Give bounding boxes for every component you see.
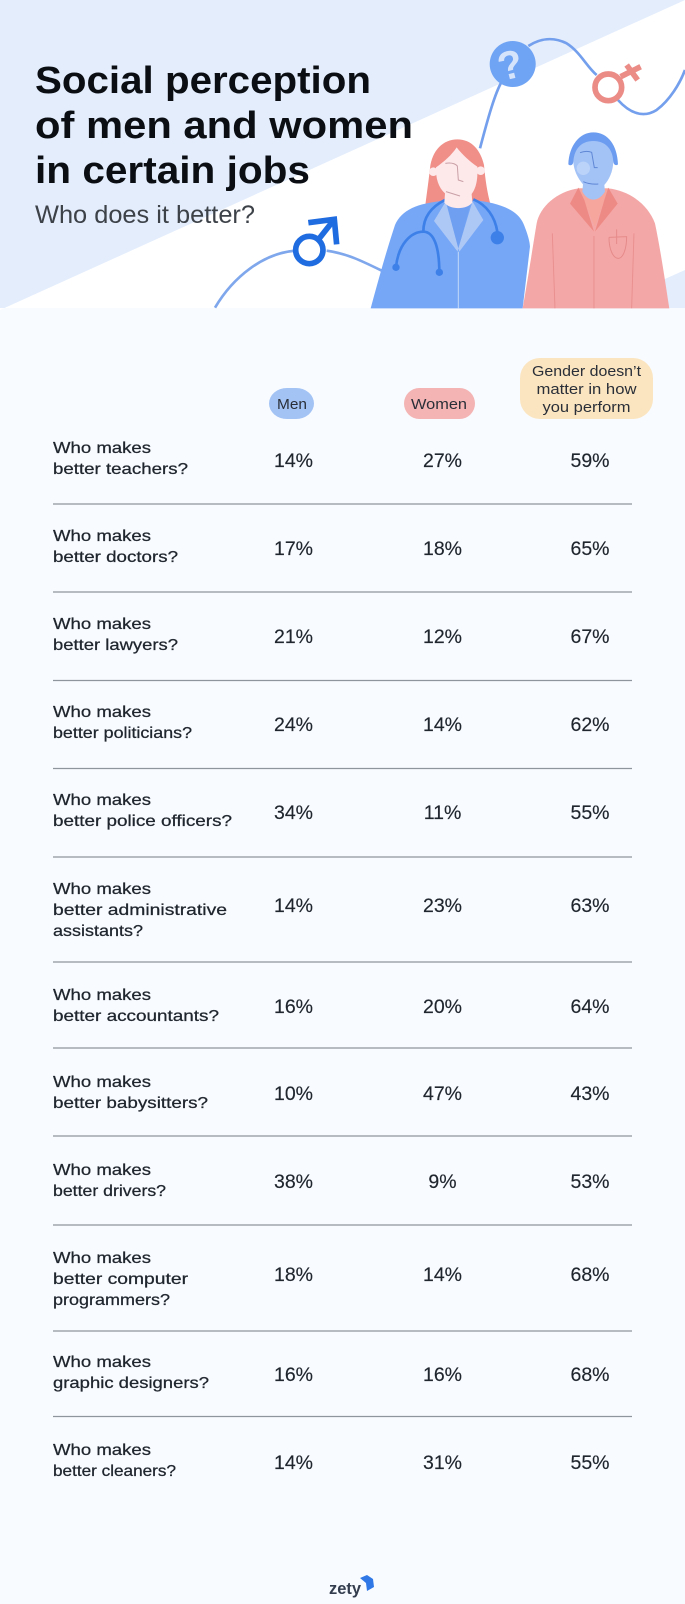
row: politicians: better politicians? bbox=[53, 725, 192, 742]
collar bbox=[434, 202, 483, 252]
row: doctors: 65% bbox=[570, 538, 610, 560]
row: graphic designers bbox=[53, 1354, 610, 1392]
row: police officers: 34% bbox=[274, 802, 313, 824]
title: in certain jobs bbox=[35, 150, 310, 192]
title: Social perception bbox=[35, 60, 371, 102]
row: computer programmers: Who makes bbox=[53, 1250, 151, 1267]
row: teachers: better teachers? bbox=[53, 461, 188, 478]
row: politicians: 62% bbox=[570, 714, 610, 736]
panel: header banner bbox=[0, 0, 685, 310]
row: doctors bbox=[53, 528, 610, 566]
row: cleaners: 31% bbox=[423, 1452, 462, 1474]
hair and ears bbox=[568, 132, 618, 165]
icon: male symbol bbox=[296, 219, 337, 264]
row: police officers: better police officers? bbox=[53, 813, 232, 830]
row: doctors: 17% bbox=[274, 538, 313, 560]
row: lawyers: Who makes bbox=[53, 616, 151, 633]
row: lawyers: 12% bbox=[423, 626, 462, 648]
row: teachers: 14% bbox=[274, 450, 313, 472]
row: cleaners: better cleaners? bbox=[53, 1463, 176, 1480]
row: accountants: 16% bbox=[274, 996, 313, 1018]
row: lawyers bbox=[53, 616, 610, 654]
row: babysitters bbox=[53, 1074, 610, 1112]
row: cleaners: 55% bbox=[570, 1452, 610, 1474]
row: computer programmers: 14% bbox=[423, 1264, 462, 1286]
illustration: male doctor bbox=[523, 132, 669, 308]
row: computer programmers: better computer bbox=[53, 1271, 189, 1288]
row: computer programmers: 18% bbox=[274, 1264, 313, 1286]
row: graphic designers: 16% bbox=[423, 1364, 462, 1386]
row: administrative assistants: better administrative bbox=[53, 902, 227, 919]
row: teachers: Who makes bbox=[53, 440, 151, 457]
row: accountants: 64% bbox=[570, 996, 610, 1018]
title bbox=[35, 60, 413, 192]
illustration: female doctor bbox=[371, 139, 530, 308]
connecting curve: male symbol line bbox=[215, 251, 382, 308]
row: administrative assistants: 63% bbox=[570, 895, 610, 917]
row: babysitters: Who makes bbox=[53, 1074, 151, 1091]
row: lawyers: better lawyers? bbox=[53, 637, 178, 654]
coat bbox=[371, 200, 530, 308]
row: administrative assistants bbox=[53, 881, 610, 940]
row: drivers: 53% bbox=[570, 1171, 610, 1193]
row: lawyers: 67% bbox=[570, 626, 610, 648]
row: teachers: 59% bbox=[570, 450, 610, 472]
row: drivers bbox=[53, 1162, 610, 1200]
row: administrative assistants: 14% bbox=[274, 895, 313, 917]
coat seams bbox=[552, 233, 634, 308]
column header: Gender doesn't matter: matter in how bbox=[536, 382, 637, 398]
column header: Gender doesn't matter: Gender doesn’t bbox=[532, 364, 641, 380]
row: computer programmers: programmers? bbox=[53, 1292, 170, 1309]
row: graphic designers: 68% bbox=[570, 1364, 610, 1386]
row: administrative assistants: Who makes bbox=[53, 881, 151, 898]
row: computer programmers bbox=[53, 1250, 610, 1309]
row: accountants bbox=[53, 987, 610, 1025]
row: babysitters: 43% bbox=[570, 1083, 610, 1105]
row: doctors: Who makes bbox=[53, 528, 151, 545]
row: lawyers: 21% bbox=[274, 626, 313, 648]
row: doctors: 18% bbox=[423, 538, 462, 560]
head and neck bbox=[429, 147, 485, 208]
lapels bbox=[570, 188, 618, 232]
scrub top bbox=[447, 203, 471, 250]
row: police officers: Who makes bbox=[53, 792, 151, 809]
logo: zety bbox=[329, 1575, 374, 1598]
row: police officers: 55% bbox=[570, 802, 610, 824]
title: of men and women bbox=[35, 105, 413, 147]
cheek highlight bbox=[577, 162, 590, 175]
face lines bbox=[580, 151, 598, 184]
shirt bbox=[578, 188, 608, 227]
row: doctors: better doctors? bbox=[53, 549, 178, 566]
row: administrative assistants: assistants? bbox=[53, 923, 143, 940]
icon: female symbol bbox=[595, 65, 641, 101]
row: police officers bbox=[53, 792, 610, 830]
row: drivers: Who makes bbox=[53, 1162, 151, 1179]
column header: Men: Men bbox=[277, 397, 307, 413]
row: computer programmers: 68% bbox=[570, 1264, 610, 1286]
row: drivers: 38% bbox=[274, 1171, 313, 1193]
row: cleaners: Who makes bbox=[53, 1442, 151, 1459]
row: accountants: better accountants? bbox=[53, 1008, 219, 1025]
icon: question mark bubble: ? bbox=[493, 41, 528, 90]
row: police officers: 11% bbox=[424, 802, 461, 824]
row: accountants: Who makes bbox=[53, 987, 151, 1004]
subtitle: Who does it better? bbox=[35, 201, 255, 229]
row: graphic designers: graphic designers? bbox=[53, 1375, 209, 1392]
row: babysitters: 47% bbox=[423, 1083, 462, 1105]
row: teachers: 27% bbox=[423, 450, 462, 472]
column header: Women bbox=[404, 388, 475, 419]
hair bbox=[425, 139, 491, 205]
row: politicians bbox=[53, 704, 610, 742]
face and neck bbox=[573, 141, 613, 200]
stethoscope bbox=[396, 199, 497, 272]
row: babysitters: 10% bbox=[274, 1083, 313, 1105]
row: administrative assistants: 23% bbox=[423, 895, 462, 917]
row: graphic designers: 16% bbox=[274, 1364, 313, 1386]
row: accountants: 20% bbox=[423, 996, 462, 1018]
row: babysitters: better babysitters? bbox=[53, 1095, 208, 1112]
coat bbox=[523, 188, 669, 308]
row: teachers bbox=[53, 440, 610, 478]
connecting curve: question and female line bbox=[480, 39, 685, 148]
row: cleaners bbox=[53, 1442, 610, 1480]
pocket and pen bbox=[609, 229, 627, 258]
row: politicians: Who makes bbox=[53, 704, 151, 721]
column header: Gender doesn't matter bbox=[520, 358, 653, 419]
row: politicians: 14% bbox=[423, 714, 462, 736]
column header: Gender doesn't matter: you perform bbox=[542, 400, 630, 416]
row: graphic designers: Who makes bbox=[53, 1354, 151, 1371]
row: drivers: 9% bbox=[428, 1171, 457, 1193]
row: cleaners: 14% bbox=[274, 1452, 313, 1474]
logo: zety: zety bbox=[329, 1579, 362, 1598]
column header: Women: Women bbox=[411, 397, 467, 413]
column header: Men bbox=[269, 388, 314, 419]
row: politicians: 24% bbox=[274, 714, 313, 736]
row: drivers: better drivers? bbox=[53, 1183, 166, 1200]
zip line bbox=[457, 252, 460, 308]
